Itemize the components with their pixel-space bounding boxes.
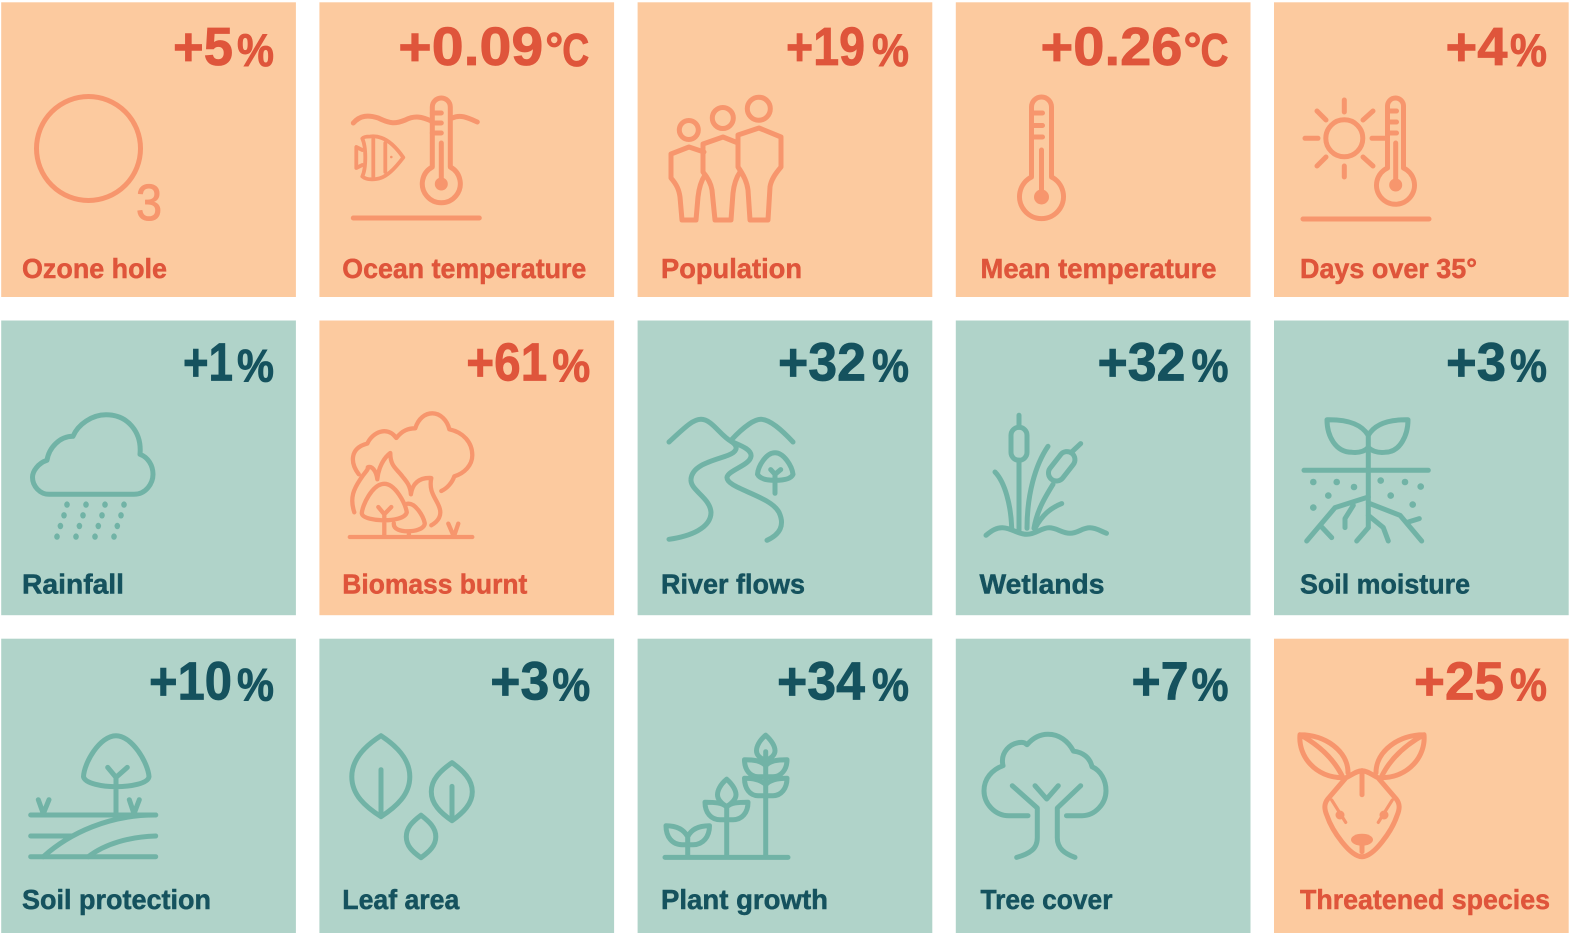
label: leaf area: Leaf area [342, 884, 460, 915]
icon: reeds [986, 415, 1106, 535]
value: +0.26°C: C [1200, 24, 1228, 76]
label: rainfall: Rainfall [22, 568, 124, 599]
icon: rain cloud [32, 415, 153, 540]
value: +32%: +32 [1098, 332, 1186, 392]
icon: O3 [36, 96, 162, 231]
value: +25%: +25 [1414, 652, 1504, 712]
value: +5%: +5 [173, 17, 233, 77]
icon: tree on fields [31, 736, 156, 857]
label: plant growth: Plant growth [661, 884, 828, 915]
value: +34%: +34 [777, 652, 865, 712]
value: +7%: % [1192, 659, 1228, 711]
panel: population [638, 2, 932, 297]
value: +3%: +3 [1446, 332, 1506, 392]
panel: days over 35 [1274, 2, 1569, 297]
label: ozone hole: Ozone hole [22, 253, 167, 284]
value: +3%: % [552, 659, 590, 711]
value: +5%: % [237, 24, 274, 76]
icon: seedling and roots [1304, 420, 1428, 541]
panel: threatened species [1274, 639, 1569, 933]
value: +32%: % [872, 339, 909, 391]
panel: wetlands [956, 320, 1250, 615]
label: ocean temperature: Ocean temperature [342, 253, 586, 284]
icon: thermometer [1020, 97, 1064, 219]
value: +0.09°C: ° [545, 23, 563, 75]
label: threatened species: Threatened species [1300, 884, 1550, 915]
value: +7%: +7 [1132, 652, 1188, 712]
value: +4%: +4 [1446, 17, 1508, 77]
label: tree cover: Tree cover [980, 884, 1113, 915]
value: +3%: +3 [490, 652, 549, 712]
value: +3%: % [1510, 339, 1547, 391]
value: +10%: +10 [149, 652, 232, 712]
panel: leaf area [319, 639, 614, 933]
panel: ocean temperature [319, 2, 614, 297]
label: river flows: River flows [661, 568, 805, 599]
icon: river and mountains [669, 419, 793, 540]
value: +34%: % [872, 659, 909, 711]
value: +19%: +19 [786, 17, 865, 77]
value: +1%: +1 [183, 332, 233, 392]
panel: soil protection [1, 639, 296, 933]
icon: people [671, 97, 781, 220]
value: +0.09°C: +0.09 [398, 17, 543, 77]
panel: rainfall [1, 320, 296, 615]
value: +0.26°C: ° [1184, 23, 1202, 75]
value: +32%: +32 [778, 332, 866, 392]
value: +0.09°C: C [562, 24, 589, 76]
icon: fish and thermometer [353, 98, 479, 218]
value: +1%: % [237, 339, 274, 391]
panel: plant growth [638, 639, 932, 933]
label: mean temperature: Mean temperature [980, 253, 1216, 284]
panel: ozone hole [1, 2, 296, 297]
icon: burning trees [350, 413, 472, 537]
label: soil protection: Soil protection [22, 884, 211, 915]
value: +32%: % [1192, 339, 1228, 391]
label: wetlands: Wetlands [980, 568, 1104, 599]
label: days over 35: Days over 35° [1300, 253, 1477, 284]
panel: tree cover [956, 639, 1250, 933]
icon: sun and thermometer [1303, 98, 1429, 219]
label: population: Population [661, 253, 802, 284]
label: biomass burnt: Biomass burnt [342, 568, 527, 599]
panel: river flows [638, 320, 932, 615]
value: +61%: % [552, 339, 590, 391]
panel: mean temperature [956, 2, 1250, 297]
panel: biomass burnt [319, 320, 614, 615]
icon: leaves [352, 736, 472, 858]
icon: growing plants [665, 735, 788, 857]
icon: O3: 3 [136, 174, 162, 231]
value: +0.26°C: +0.26 [1040, 17, 1182, 77]
value: +19%: % [872, 24, 909, 76]
value: +10%: % [237, 659, 274, 711]
value: +4%: % [1510, 24, 1547, 76]
icon: tree [984, 734, 1106, 857]
label: soil moisture: Soil moisture [1300, 568, 1470, 599]
value: +25%: % [1510, 659, 1547, 711]
panel: soil moisture [1274, 320, 1569, 615]
value: +61%: +61 [466, 332, 547, 392]
icon: kangaroo head [1300, 735, 1424, 857]
